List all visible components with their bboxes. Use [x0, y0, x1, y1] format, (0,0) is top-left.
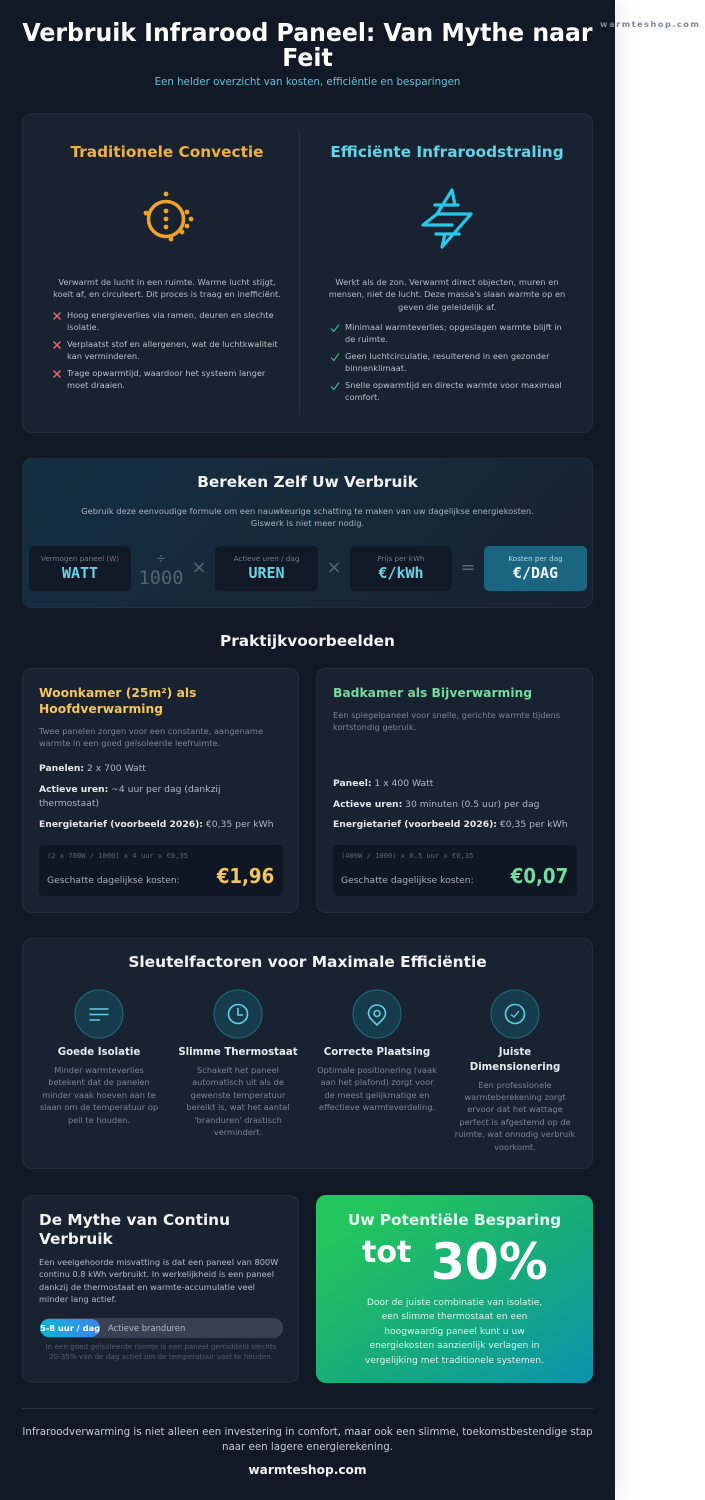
spec: active hours: thermostaat) — [39, 798, 99, 809]
footer text: Infraroodverwarming is niet alleen een investering in comfort, maar ook een slimme, toekomstbestendige stap — [22, 1426, 593, 1438]
text: bar note — [22, 1342, 300, 1362]
factor text: ruimte, wat onnodig verbruik — [455, 1129, 575, 1139]
footer brand: warmteshop.com — [248, 1463, 367, 1477]
formula operator: divide by 1000: 1000 — [139, 568, 183, 589]
text: savings explanation — [316, 1296, 593, 1368]
factor text: voorkomt. — [494, 1142, 536, 1152]
factor text: 'branduren' drastisch — [194, 1115, 282, 1125]
factor title: Goede Isolatie — [58, 1047, 140, 1058]
factor text: perfect is afgestemd op de — [459, 1117, 571, 1127]
formula operator: divide by 1000 — [139, 551, 183, 589]
text: myth explanation: continu 0.8 kWh verbruikt. In werkelijkheid is een paneel — [39, 1269, 274, 1279]
footer text — [0, 1425, 615, 1454]
formula box: hours — [215, 546, 318, 591]
list item — [345, 322, 562, 344]
factor text — [317, 1065, 437, 1112]
list item — [67, 310, 274, 332]
text: bathroom description: Een spiegelpaneel voor snelle, gerichte warmte tijdens — [333, 710, 560, 720]
formula operator: equals: = — [460, 557, 476, 578]
formula box: price: €/kWh — [378, 564, 424, 582]
text: savings explanation: vergelijking met traditionele systemen. — [365, 1356, 544, 1366]
text: bar note: 20-35% van de dag actief om de temperatuur vast te houden. — [49, 1352, 273, 1361]
panel: bathroom example — [316, 668, 593, 913]
factor text: warmteberekening zorgt — [464, 1092, 566, 1102]
factor text: effectieve warmteverdeling. — [319, 1102, 435, 1112]
icon: thermostat clock — [214, 990, 262, 1038]
spec: energy rate: Energietarief (voorbeeld 2026): €0,35 per kWh — [333, 819, 568, 830]
list item — [66, 368, 266, 390]
factor text: bereikt is, wat het aantal — [186, 1102, 290, 1112]
formula box: price — [350, 546, 452, 591]
text: infrared description: Werkt als de zon. Verwarmt direct objecten, muren en — [335, 277, 559, 287]
text: myth explanation: Een veelgehoorde misvatting is dat een paneel van 800W — [39, 1257, 278, 1267]
text: living room description — [39, 726, 263, 748]
panel: convection vs infrared comparison — [22, 113, 593, 433]
text: infrared description: geven die geleidelijk af. — [398, 302, 496, 312]
heading: traditional convection: Traditionele Convectie — [70, 143, 264, 161]
icon: check — [330, 353, 340, 362]
factor text: slaan om de temperatuur op — [40, 1102, 158, 1112]
calculation formula: (400W / 1000) x 0.5 uur x €0,35 — [341, 851, 473, 860]
title: Feit — [282, 43, 333, 72]
progress bar: active burn hours — [40, 1318, 283, 1338]
list item — [345, 380, 562, 402]
progress bar fill — [40, 1319, 100, 1337]
savings figure: tot — [362, 1235, 411, 1270]
list item: comfort. — [345, 392, 380, 402]
heading: savings: Uw Potentiële Besparing — [348, 1211, 561, 1229]
list item: moet draaien. — [67, 380, 125, 390]
text: convection description: koelt af, en circuleert. Dit proces is traag en inefficiënt. — [53, 289, 281, 299]
panel: continuous consumption myth — [22, 1195, 299, 1383]
text: infrared description: mensen, niet de lucht. Deze massa's slaan warmte op en — [329, 289, 565, 299]
text: formula intro — [81, 506, 534, 528]
formula box: price: Prijs per kWh — [377, 554, 425, 563]
factor text: betekent dat de panelen — [48, 1077, 150, 1087]
icon: check — [330, 382, 340, 390]
list item: Geen luchtcirculatie, resulterend in een gezonder — [345, 350, 549, 360]
text: savings explanation: energiekosten aanzienlijk verlagen in — [370, 1341, 539, 1351]
list item: Hoog energieverlies via ramen, deuren en slechte — [67, 310, 274, 320]
formula box: hours: UREN — [248, 564, 285, 582]
text: convection description — [53, 277, 281, 299]
factor text — [186, 1065, 290, 1137]
factor text: Optimale positionering (vaak — [317, 1065, 437, 1075]
list: infrared benefits — [330, 322, 562, 402]
calculation result box — [333, 845, 577, 896]
watermark: warmteshop.com — [600, 19, 700, 29]
spec: active hours: Actieve uren: ~4 uur per dag (dankzij — [39, 784, 221, 795]
text: living room description: Twee panelen zorgen voor een constante, aangename — [39, 726, 263, 736]
factor text: automatisch uit als de — [192, 1077, 284, 1087]
formula box: wattage — [29, 546, 131, 591]
list item: de ruimte. — [345, 334, 388, 344]
calculation formula: (2 x 700W / 1000) x 4 uur x €0,35 — [47, 851, 188, 860]
factor text: peil te houden. — [68, 1115, 130, 1125]
title — [22, 18, 593, 72]
progress bar fill: 5-8 uur / dag — [40, 1323, 100, 1333]
factor title: Correcte Plaatsing — [324, 1047, 430, 1058]
text: savings explanation: een slimme thermostaat en een — [382, 1312, 527, 1322]
spec: panel: Paneel: 1 x 400 Watt — [333, 778, 433, 789]
factor text: Een professionele — [478, 1080, 552, 1090]
spec: active hours — [39, 784, 221, 809]
spec: active hours: Actieve uren: 30 minuten (0.5 uur) per dag — [333, 799, 539, 810]
heading: myth: De Mythe van Continu — [39, 1211, 230, 1229]
text: formula intro: Gebruik deze eenvoudige formule om een nauwkeurige schatting te maken van uw dagelijkse energiekosten. — [81, 506, 534, 516]
heading: key factors: Sleutelfactoren voor Maximale Efficiëntie — [128, 953, 487, 971]
cost value: €1,96 — [216, 864, 274, 888]
icon: cross — [53, 312, 61, 320]
factor text: vermindert. — [214, 1127, 262, 1137]
list item: Snelle opwarmtijd en directe warmte voor maximaal — [345, 380, 562, 390]
list item: kan verminderen. — [67, 351, 140, 361]
factor text — [40, 1065, 158, 1125]
title: Verbruik Infrarood Paneel: Van Mythe naar — [22, 18, 593, 47]
factor text: Schakelt het paneel — [197, 1065, 279, 1075]
panel: key factors — [22, 938, 593, 1169]
text: formula intro: Giswerk is niet meer nodig. — [251, 518, 364, 528]
panel: calculation formula — [22, 458, 593, 608]
text: living room description: warmte in een goed geïsoleerde leefruimte. — [39, 738, 220, 748]
text: myth explanation — [39, 1256, 278, 1306]
formula box: result: Kosten per dag — [508, 554, 563, 563]
heading: efficient infrared: Efficiënte Infraroodstraling — [330, 143, 564, 161]
icon: insulation lines — [74, 990, 124, 1038]
text: bathroom description — [333, 710, 560, 732]
cost value: €0,07 — [510, 864, 568, 888]
list item: Trage opwarmtijd, waardoor het systeem langer — [67, 368, 265, 378]
calculation result box — [39, 845, 283, 896]
factor text — [455, 1080, 575, 1152]
icon: cross — [53, 370, 61, 378]
factor text: Minder warmteverlies — [54, 1065, 144, 1075]
subtitle: Een helder overzicht van kosten, efficiëntie en besparingen — [155, 76, 460, 88]
heading: myth — [39, 1211, 230, 1248]
factor title: Juiste — [499, 1047, 531, 1058]
formula box: wattage: Vermogen paneel (W) — [41, 554, 119, 563]
footer text: naar een lagere energierekening. — [222, 1440, 393, 1452]
formula operator: divide by 1000: ÷ — [157, 551, 165, 567]
heading: practical examples: Praktijkvoorbeelden — [220, 632, 395, 650]
progress bar label: Actieve branduren — [108, 1323, 185, 1333]
text: myth explanation: dankzij de thermostaat en warmte-accumulatie veel — [39, 1282, 255, 1292]
factor text: gewenste temperatuur — [191, 1090, 285, 1100]
factor text: de meest gelijkmatige en — [324, 1090, 430, 1100]
factor title: Slimme Thermostaat — [178, 1047, 298, 1058]
list item: Minimaal warmteverlies; opgeslagen warmte blijft in — [345, 322, 562, 332]
factor text: minder vaak hoeven aan te — [42, 1090, 156, 1100]
text: bathroom description: kortstondig gebruik. — [333, 722, 416, 732]
panel: living room example — [22, 668, 299, 913]
text: bar note: In een goed geïsoleerde ruimte is een paneel gemiddeld slechts — [46, 1342, 276, 1351]
heading: formula: Bereken Zelf Uw Verbruik — [197, 473, 418, 491]
savings figure — [362, 1232, 552, 1292]
text: myth explanation: minder lang actief. — [39, 1294, 116, 1304]
text: infrared description — [329, 277, 565, 312]
heading: living room: Hoofdverwarming — [39, 702, 163, 716]
formula box: result: €/DAG — [513, 564, 558, 582]
heading: living room — [39, 686, 196, 716]
formula box: wattage: WATT — [62, 564, 98, 582]
icon: cross — [53, 341, 61, 349]
list item: binnenklimaat. — [345, 363, 407, 373]
text: savings explanation: Door de juiste combinatie van isolatie, — [367, 1298, 542, 1308]
icon: infrared lightning — [421, 188, 473, 249]
list item: Verplaatst stof en allergenen, wat de luchtkwaliteit — [67, 338, 278, 348]
formula box: result — [484, 546, 587, 591]
icon: placement pin — [352, 990, 402, 1038]
heading: bathroom: Badkamer als Bijverwarming — [333, 686, 532, 700]
factor title: Dimensionering — [470, 1062, 560, 1072]
list item — [67, 338, 278, 361]
formula operator: times: × — [191, 557, 207, 578]
icon: convection sun circle — [144, 192, 194, 242]
factor text: ervoor dat het wattage — [467, 1104, 563, 1114]
heading: myth: Verbruik — [39, 1230, 113, 1248]
formula box: hours: Actieve uren / dag — [234, 554, 299, 563]
spec: panels: Panelen: 2 x 700 Watt — [39, 763, 146, 774]
text: savings explanation: hoogwaardig paneel kunt u uw — [384, 1327, 525, 1337]
savings figure: 30% — [431, 1233, 548, 1291]
icon: check — [330, 324, 340, 332]
heading: living room: Woonkamer (25m²) als — [39, 686, 196, 700]
list item — [345, 350, 550, 373]
icon: sizing check — [490, 990, 540, 1038]
panel: potential savings — [316, 1195, 593, 1383]
cost label: Geschatte dagelijkse kosten: — [47, 875, 180, 886]
formula operator: times: × — [326, 557, 342, 578]
spec: energy rate: Energietarief (voorbeeld 2026): €0,35 per kWh — [39, 819, 274, 830]
factor title — [470, 1047, 560, 1072]
list: convection drawbacks — [53, 310, 278, 390]
cost label: Geschatte dagelijkse kosten: — [341, 875, 474, 886]
factor text: aan het plafond) zorgt voor — [320, 1077, 434, 1087]
list item: isolatie. — [67, 322, 99, 332]
text: convection description: Verwarmt de lucht in een ruimte. Warme lucht stijgt, — [58, 277, 276, 287]
